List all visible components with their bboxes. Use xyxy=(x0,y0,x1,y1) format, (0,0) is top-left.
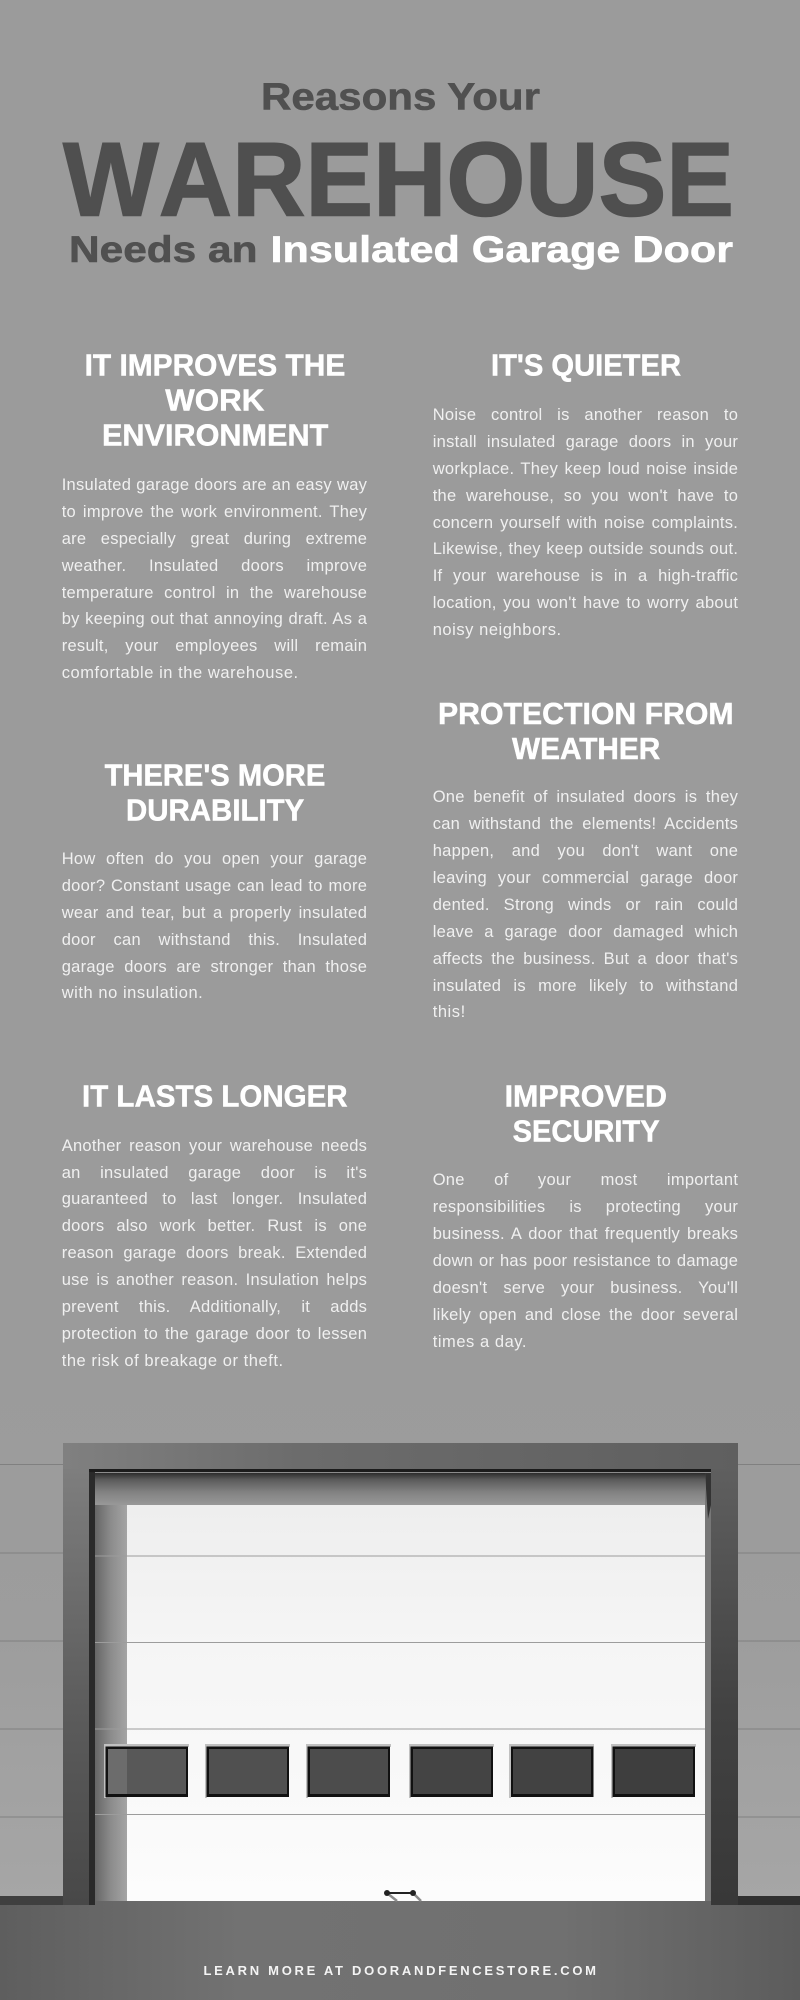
text block: weather. Insulated doors improve xyxy=(62,557,367,575)
heading: DURABILITY xyxy=(126,793,304,828)
text block: garage doors are stronger than those xyxy=(62,958,367,976)
text block: Insulated garage doors are an easy way xyxy=(62,476,367,494)
panel: there's more durability xyxy=(62,758,367,1002)
text block: likely open and close the door several xyxy=(433,1306,738,1324)
text block: doors also work better. Rust is one xyxy=(62,1217,367,1235)
panel: protection from weather xyxy=(433,696,738,1021)
title line: Needs an Insulated Garage Door: Insulated Garage Door xyxy=(270,229,733,270)
text block: responsibilities is protecting your xyxy=(433,1198,738,1216)
title line: Reasons Your: Reasons Your xyxy=(261,76,540,118)
text block: times a day. xyxy=(433,1333,527,1351)
wall xyxy=(0,1370,800,1905)
panel: improved security xyxy=(433,1079,738,1351)
icon: door handle xyxy=(384,1890,421,1901)
text block: comfortable in the warehouse. xyxy=(62,664,299,682)
heading: WORK xyxy=(165,383,265,418)
text block: noisy neighbors. xyxy=(433,621,562,639)
door frame xyxy=(63,1443,738,1905)
heading: SECURITY xyxy=(512,1114,660,1149)
heading: WEATHER xyxy=(512,731,660,766)
text block: the risk of breakage or theft. xyxy=(62,1352,284,1370)
text block xyxy=(433,1171,738,1351)
footer call to action: LEARN MORE AT DOORANDFENCESTORE.COM xyxy=(204,1963,596,1978)
title line: Needs an Insulated Garage Door xyxy=(69,229,733,270)
text block: Likewise, they keep outside sounds out. xyxy=(433,540,738,558)
heading xyxy=(84,348,345,453)
floor xyxy=(0,1896,800,2000)
text block: this! xyxy=(433,1003,466,1021)
heading: IT IMPROVES THE xyxy=(84,348,345,383)
text block: guaranteed to last longer. Insulated xyxy=(62,1190,367,1208)
text block: location, you won't have to worry about xyxy=(433,594,738,612)
text block: by keeping out that annoying draft. As a xyxy=(62,610,367,628)
text block: dented. Strong winds or rain could xyxy=(433,896,738,914)
text block: One of your most important xyxy=(433,1171,738,1189)
text block: happen, and you don't want one xyxy=(433,842,738,860)
title xyxy=(62,76,734,270)
text block: use is another reason. Insulation helps xyxy=(62,1271,367,1289)
title line: Needs an Insulated Garage Door: Needs an xyxy=(69,229,258,270)
text block: Another reason your warehouse needs xyxy=(62,1137,367,1155)
text block xyxy=(432,406,738,639)
text block: to improve the work environment. They xyxy=(62,503,367,521)
heading: IMPROVED xyxy=(504,1079,667,1114)
text block: down or has poor resistance to damage xyxy=(433,1252,738,1270)
text block: leaving your commercial garage door xyxy=(433,869,738,887)
text block: leave a garage door damaged which xyxy=(433,923,738,941)
text block: concern yourself with noise complaints. xyxy=(433,514,738,532)
text block: Noise control is another reason to xyxy=(433,406,738,424)
heading: IT'S QUIETER xyxy=(491,348,681,383)
text block xyxy=(62,850,367,1002)
heading: ENVIRONMENT xyxy=(102,418,328,453)
text block: One benefit of insulated doors is they xyxy=(433,788,738,806)
text block: wear and tear, but a properly insulated xyxy=(62,904,367,922)
text block xyxy=(62,1137,367,1370)
heading: PROTECTION FROM xyxy=(438,696,733,731)
text block: with no insulation. xyxy=(62,984,203,1002)
text block: If your warehouse is in a high-traffic xyxy=(433,567,738,585)
heading: IT LASTS LONGER xyxy=(82,1079,347,1114)
text block: install insulated garage doors in your xyxy=(433,433,738,451)
text block: can withstand the elements! Accidents xyxy=(433,815,738,833)
text block: workplace. They keep loud noise inside xyxy=(433,460,738,478)
panel: it improves the work environment xyxy=(62,348,367,682)
text block: reason garage doors break. Extended xyxy=(62,1244,367,1262)
heading xyxy=(438,696,733,766)
text block: an insulated garage door is it's xyxy=(62,1164,367,1182)
heading xyxy=(504,1079,667,1149)
panel: it lasts longer xyxy=(62,1079,367,1370)
text block: door? Constant usage can lead to more xyxy=(62,877,367,895)
text block xyxy=(433,788,738,1021)
heading xyxy=(104,758,325,828)
panel: it's quieter xyxy=(432,348,738,639)
door windows xyxy=(104,1744,696,1798)
text block: temperature control in the warehouse xyxy=(62,584,367,602)
text block xyxy=(62,476,367,682)
text block: are especially great during extreme xyxy=(62,530,367,548)
garage door xyxy=(89,1469,711,1905)
text block: affects the business. But a door that's xyxy=(433,950,738,968)
text block: prevent this. Additionally, it adds xyxy=(62,1298,367,1316)
text block: doesn't serve your business. You'll xyxy=(433,1279,738,1297)
text block: protection to the garage door to lessen xyxy=(62,1325,367,1343)
text block: door can withstand this. Insulated xyxy=(62,931,367,949)
heading: THERE'S MORE xyxy=(104,758,325,793)
title line: WAREHOUSE: WAREHOUSE xyxy=(63,122,734,238)
text block: insulated is more likely to withstand xyxy=(433,977,738,995)
text block: result, your employees will remain xyxy=(62,637,367,655)
text block: How often do you open your garage xyxy=(62,850,367,868)
text block: business. A door that frequently breaks xyxy=(433,1225,738,1243)
text block: the warehouse, so you won't have to xyxy=(433,487,738,505)
